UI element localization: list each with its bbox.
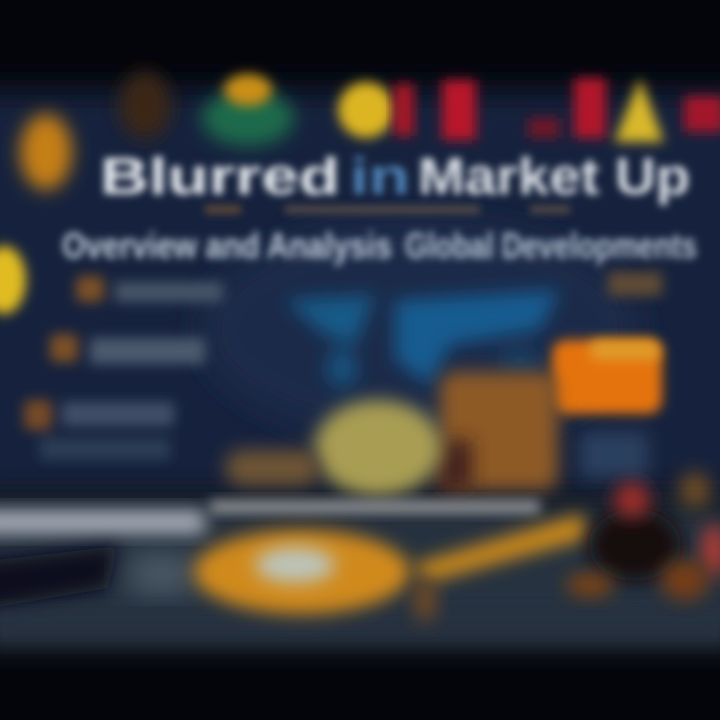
berries and garnish (566, 472, 720, 600)
small orange caption (205, 205, 570, 214)
stack of food objects (225, 340, 662, 496)
list item 1 (76, 276, 223, 302)
list with bullet icons (24, 276, 223, 460)
tan handle (225, 450, 320, 486)
table surface (0, 500, 720, 642)
title: in (350, 148, 410, 206)
brown cylinder (440, 372, 558, 490)
list item 3 (24, 400, 174, 460)
left side yellow objects (0, 114, 72, 314)
list item 2 (50, 334, 205, 364)
title: Market Up (418, 148, 690, 206)
subtitle (62, 225, 697, 266)
world map (285, 290, 560, 388)
blue-grey panel (580, 432, 648, 478)
title (100, 148, 690, 206)
subtitle: Overview and Analysis (62, 225, 392, 266)
top row of coloured objects (119, 71, 720, 146)
pale yellow disc (314, 400, 442, 496)
small top-right label (608, 272, 662, 296)
title: Blurred (100, 148, 340, 206)
orange block (552, 340, 662, 414)
golden spoon (194, 514, 588, 622)
